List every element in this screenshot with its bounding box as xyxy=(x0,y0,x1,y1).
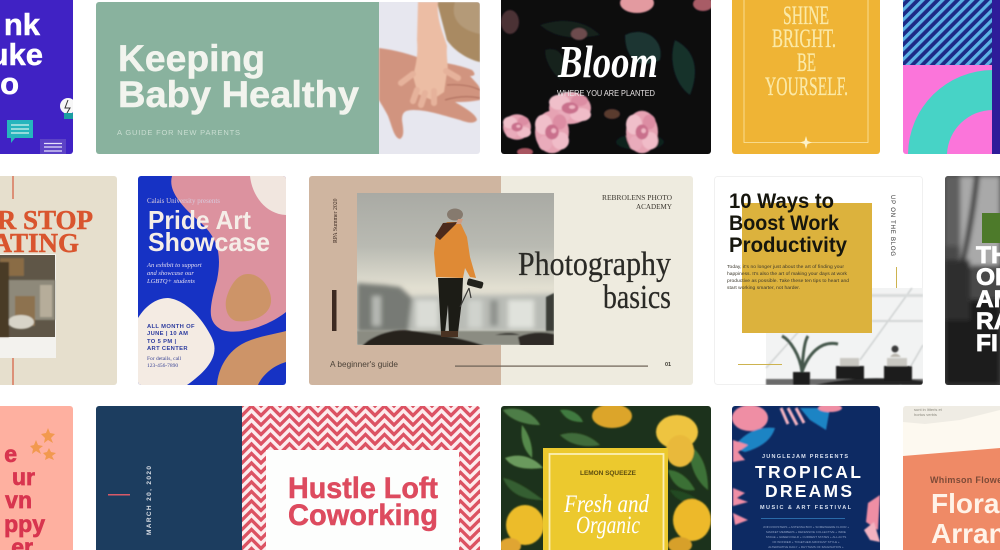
label frame xyxy=(550,454,664,550)
icon: lightbulb xyxy=(60,98,73,119)
headline: Keeping xyxy=(118,38,265,79)
torn book page: hortus verbis xyxy=(914,412,937,417)
orange panel xyxy=(903,448,1000,550)
contact xyxy=(147,356,181,367)
torn book page: sunt in litteris et xyxy=(914,407,943,412)
inner frame xyxy=(744,0,868,142)
headline xyxy=(4,441,45,550)
photo: misty forest xyxy=(945,176,1000,385)
icon: sparkle xyxy=(800,136,812,149)
photo: artist studio xyxy=(0,255,55,337)
headline: FI xyxy=(976,330,998,357)
subtitle: A beginner's guide xyxy=(330,359,398,369)
quote text: SHINE xyxy=(783,1,829,30)
rule xyxy=(761,518,845,519)
yellow label xyxy=(543,448,668,550)
lineup text: JOIN ROOSTERS + ANTENNA BOX + SOMEWHERE FLOOR + xyxy=(763,525,849,529)
vertical issue label: RPA Summer 2020 xyxy=(333,198,339,243)
headline xyxy=(0,210,92,252)
card: purple think-make poster xyxy=(0,0,76,155)
title: Pride Art xyxy=(148,205,251,235)
pink block xyxy=(903,65,993,155)
page number: 01 xyxy=(665,362,671,368)
card: pink happy hour poster xyxy=(0,406,73,550)
foliage: top xyxy=(732,404,880,542)
blob: tan centre xyxy=(226,274,271,321)
body copy xyxy=(727,264,849,291)
card: 10 ways to boost work productivity xyxy=(714,176,923,385)
blob: tan lower right xyxy=(217,331,286,385)
photo: lemons and leaves xyxy=(499,404,711,550)
description: LGBTQ+ students xyxy=(146,278,195,285)
accent line xyxy=(108,494,130,496)
title: DREAMS xyxy=(765,481,852,501)
description: and showcase our xyxy=(147,270,194,277)
card: beige never stop creating poster xyxy=(0,176,117,385)
headline: e xyxy=(4,441,17,467)
academy name xyxy=(602,193,673,211)
headline: Boost Work xyxy=(729,212,839,235)
card: photography basics xyxy=(309,176,693,385)
presenter: Calais University presents xyxy=(147,197,220,205)
blob: cream lower left xyxy=(138,298,214,385)
green block xyxy=(982,213,1000,243)
card: keeping baby healthy xyxy=(96,2,480,154)
striped block xyxy=(903,0,993,66)
description: An exhibit to support xyxy=(146,262,202,269)
academy name: ACADEMY xyxy=(636,202,673,211)
title xyxy=(755,462,861,501)
title: Showcase xyxy=(148,227,270,257)
date and venue: JUNE | 10 AM xyxy=(147,331,188,337)
lineup text: ALTERNATIVE DAILY + RHYTHMS OF IMAGINATION + xyxy=(768,545,844,549)
card: lemon squeeze xyxy=(499,404,711,550)
rule xyxy=(455,366,648,367)
title: basics xyxy=(603,279,671,316)
subtitle: MUSIC & ART FESTIVAL xyxy=(760,505,852,511)
headline: Productivity xyxy=(729,234,847,257)
headline xyxy=(729,190,847,257)
presenter: JUNGLEJAM PRESENTS xyxy=(762,454,848,460)
purple side bar xyxy=(992,0,1000,160)
headline: 10 Ways to xyxy=(729,190,834,213)
body copy: productive as possible. Take these ten tips to heart and xyxy=(727,278,849,284)
card: bloom floral poster xyxy=(501,0,713,156)
quote text: YOURSELF. xyxy=(765,72,848,101)
body copy: start working smarter, not harder. xyxy=(727,285,800,291)
white title box xyxy=(266,450,459,550)
bottom accent line xyxy=(738,364,782,365)
headline xyxy=(118,38,359,115)
title xyxy=(148,210,270,252)
card: tropical dreams xyxy=(732,404,880,550)
quote text: BE xyxy=(797,48,816,77)
body copy: happiness. It's also the art of making your days at work xyxy=(727,271,848,277)
academy name: REBROLENS PHOTO xyxy=(602,193,673,202)
navy panel xyxy=(96,406,242,550)
lineup text xyxy=(763,525,849,549)
teal arc xyxy=(908,70,993,154)
photo: person at waterfall xyxy=(357,193,554,346)
lineup text: OF WONDER + TOGETHER AMONGST STYLE + xyxy=(772,540,840,544)
title: Coworking xyxy=(288,499,438,532)
yellow square xyxy=(742,203,872,333)
card: geometric pattern xyxy=(903,0,1000,160)
card: hustle loft coworking xyxy=(96,406,480,550)
headline: ur xyxy=(12,464,35,490)
script title xyxy=(563,491,649,539)
blob: cream top xyxy=(250,176,286,215)
vertical label: UP ON THE BLOG xyxy=(889,195,895,256)
date and venue: TO 5 PM | xyxy=(147,339,176,345)
title: TROPICAL xyxy=(755,462,861,482)
photo: baby and parent hands xyxy=(379,2,480,154)
dark bar xyxy=(332,290,336,331)
chevron panel xyxy=(242,406,480,550)
script title: Fresh and xyxy=(563,491,649,518)
vertical accent lines xyxy=(12,176,14,385)
title script: Bloom xyxy=(557,36,658,87)
subtitle: A GUIDE FOR NEW PARENTS xyxy=(117,128,240,137)
headline fragment: nk xyxy=(4,7,41,42)
vertical date: MARCH 20, 2020 xyxy=(146,466,153,535)
quote text: BRIGHT. xyxy=(772,24,836,53)
date and venue xyxy=(147,324,195,352)
icon: stars xyxy=(30,428,56,460)
card: floral arrangement xyxy=(903,406,1000,550)
quote text xyxy=(765,6,848,96)
lineup text: STAGE + GREEN FIELD + CURRENT STATES + ALL ACTS xyxy=(766,535,846,539)
body copy: Today, it's no longer just about the art of finding your xyxy=(727,264,844,270)
date and venue: ART CENTER xyxy=(147,346,188,352)
photo: office with chairs xyxy=(766,288,923,385)
torn book page xyxy=(903,406,1000,424)
contact: For details, call xyxy=(147,356,182,362)
contact: 123-456-7890 xyxy=(147,363,178,369)
accent line xyxy=(896,267,897,288)
card: shine bright poster xyxy=(732,0,880,154)
lineup text: MARKET MEMBERS + DEFENSIVE COLLECTIVE + INDIE xyxy=(766,530,846,534)
torn paper xyxy=(0,254,56,358)
headline xyxy=(976,242,1000,357)
headline fragment: o xyxy=(0,66,19,101)
headline: vn xyxy=(5,487,32,513)
headline: ppy xyxy=(4,511,45,537)
headline: Baby Healthy xyxy=(118,74,359,115)
card: pride art showcase xyxy=(138,176,286,385)
icon: speech bubble xyxy=(7,120,33,143)
brand: LEMON SQUEEZE xyxy=(580,470,637,477)
card: forest poster xyxy=(945,176,1000,385)
title: Photography xyxy=(518,246,671,283)
blob: pink xyxy=(171,176,286,332)
script title: Organic xyxy=(576,512,640,539)
title: Hustle Loft xyxy=(288,472,438,505)
date and venue: ALL MONTH OF xyxy=(147,324,195,330)
headline fragment xyxy=(0,12,42,94)
title xyxy=(288,472,438,532)
photo: dark leaves and roses xyxy=(501,0,713,156)
subtitle: WHERE YOU ARE PLANTED xyxy=(557,88,655,98)
icon: message box xyxy=(40,139,66,155)
title xyxy=(518,246,671,316)
description xyxy=(146,262,202,285)
title xyxy=(931,488,1000,549)
